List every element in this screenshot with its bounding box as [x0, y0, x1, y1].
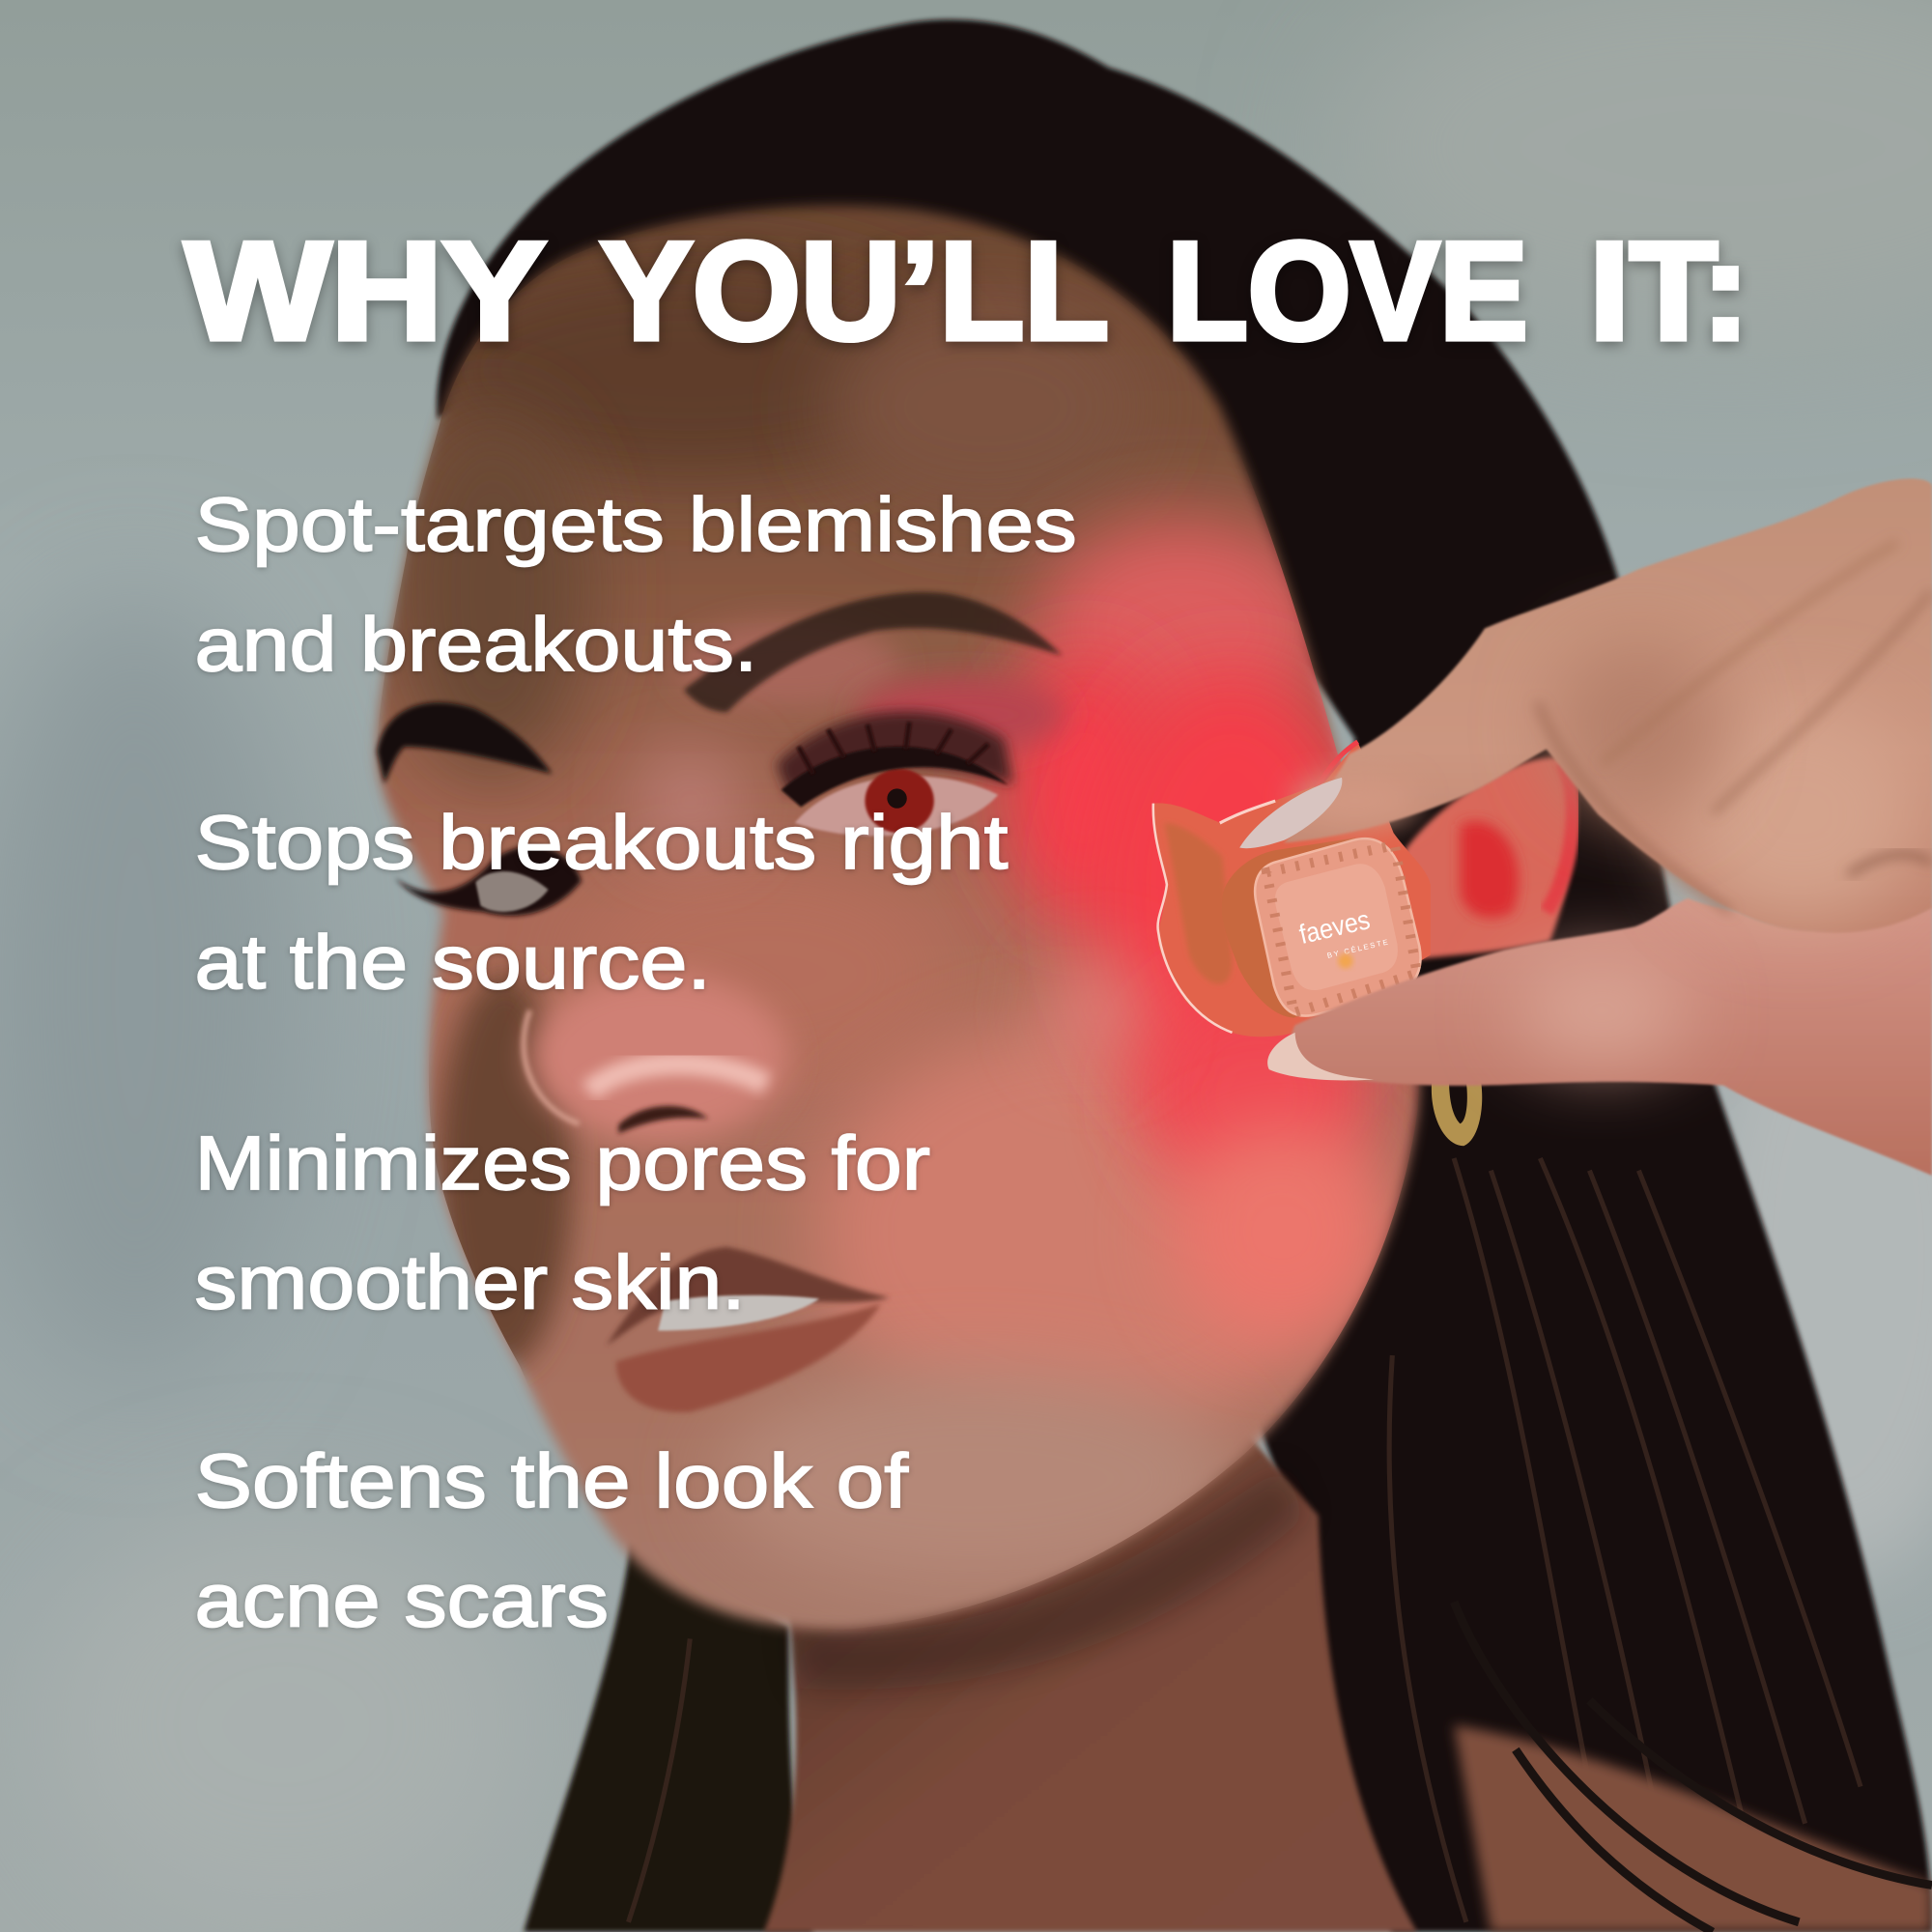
nose: [524, 974, 788, 1141]
device body: [1222, 838, 1392, 1018]
eye: right of image: [777, 712, 1012, 836]
device logo text: [1296, 901, 1390, 965]
neck and shoulder: [764, 1417, 1932, 1932]
eyebrows: [377, 592, 1062, 783]
benefit 2: breakouts: Stops breakouts right: [195, 799, 1008, 885]
title: YOU’LL: [600, 213, 1109, 369]
index finger and fist: [1284, 478, 1932, 933]
title: [185, 213, 1749, 369]
eye: left of image: [394, 846, 582, 916]
hand holding the device: [1239, 478, 1932, 1176]
benefit 4: acne scars: [195, 1437, 909, 1643]
title: WHY: [185, 213, 546, 369]
device LED: [1338, 953, 1353, 969]
device logo text: BY CÉLESTE: [1326, 937, 1390, 960]
skin shading and red light glow: [394, 259, 1392, 1589]
device face: [1255, 838, 1421, 1016]
benefit 1: blemishes: and breakouts.: [195, 601, 757, 687]
benefit 4: acne scars: Softens the look of: [195, 1437, 909, 1523]
benefit 3: pores: [195, 1120, 930, 1325]
benefit 3: pores: smoother skin.: [195, 1239, 746, 1325]
benefit 1: blemishes: Spot-targets blemishes: [195, 481, 1077, 567]
device back plate: [1153, 742, 1431, 1037]
device logo text: faeves: [1296, 904, 1373, 950]
title: IT:: [1589, 213, 1749, 369]
benefit 3: pores: Minimizes pores for: [195, 1120, 930, 1206]
thumb: [1290, 898, 1932, 1176]
benefit 4: acne scars: acne scars: [195, 1557, 609, 1643]
lips and teeth: [607, 1247, 890, 1412]
title: LOVE: [1167, 213, 1528, 369]
hair: [437, 19, 1932, 1932]
face: [377, 206, 1419, 1630]
benefit 1: blemishes: [195, 481, 1077, 687]
benefit 2: breakouts: at the source.: [195, 919, 711, 1005]
ear: [1405, 757, 1577, 961]
gold hoop earring: [1432, 1079, 1482, 1146]
nail: [1239, 778, 1342, 848]
faeves cat-ear device: [1153, 742, 1431, 1037]
benefit 2: breakouts: [195, 799, 1008, 1005]
